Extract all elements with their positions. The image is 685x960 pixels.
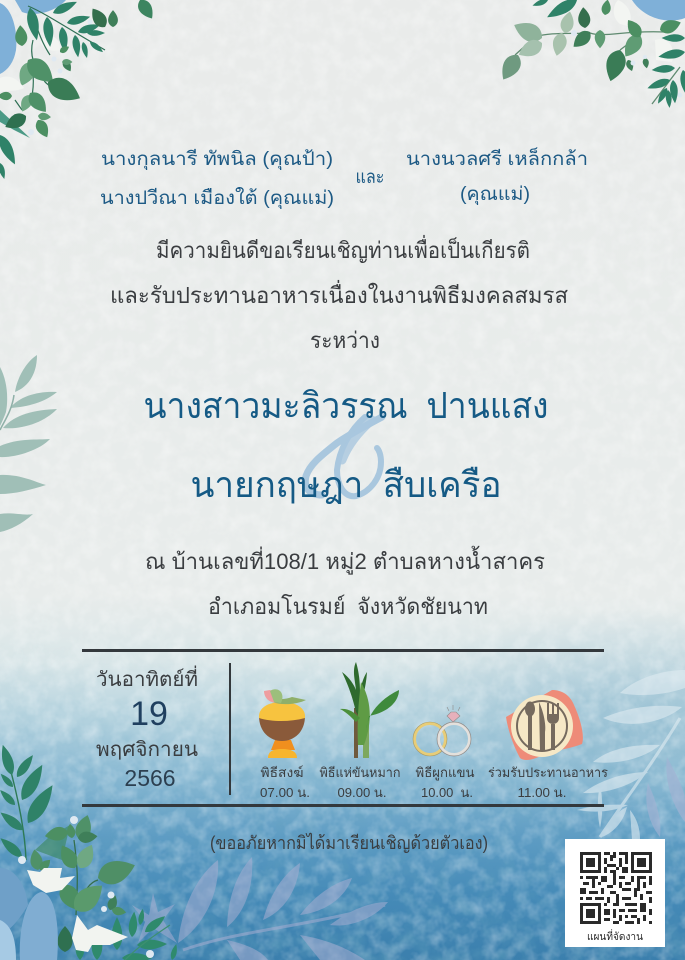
ceremony labels: 07.00 น.	[260, 785, 310, 800]
faded purple leaves bottom	[132, 857, 388, 960]
foliage top left	[0, 0, 157, 180]
connector and: และ	[356, 167, 384, 188]
rule bottom	[82, 804, 604, 807]
hosts left column	[100, 148, 334, 210]
icon: rings	[413, 705, 471, 756]
invitation text: ระหว่าง	[310, 328, 380, 353]
foliage bottom left	[0, 743, 179, 960]
hosts right column	[406, 146, 588, 206]
ceremony labels: พิธีสงฆ์	[260, 765, 304, 780]
icon: sugarcane	[340, 662, 399, 758]
ampersand ornament	[305, 417, 382, 496]
background	[0, 614, 685, 960]
icon: ceremonial bowl	[259, 689, 306, 758]
hosts right column: นางนวลศรี เหล็กกล้า	[406, 146, 588, 170]
faded white leaves right	[577, 670, 685, 840]
faded green fronds left	[0, 355, 57, 532]
date block: 2566	[124, 765, 176, 791]
foliage top right	[496, 0, 685, 108]
invitation text	[110, 234, 568, 353]
divider	[229, 663, 231, 795]
ceremony labels: พิธีผูกแขน	[416, 765, 475, 781]
ceremony labels	[260, 765, 608, 800]
venue text: อำเภอมโนรมย์ จังหวัดชัยนาท	[208, 594, 488, 619]
apology note: (ขออภัยหากมิได้มาเรียนเชิญด้วยตัวเอง)	[210, 832, 488, 853]
groom name: นายกฤษฎา สืบเครือ	[190, 464, 502, 505]
invitation text: มีความยินดีขอเรียนเชิญท่านเพื่อเป็นเกียรติ	[156, 234, 530, 263]
ceremony labels: 10.00 น.	[421, 785, 473, 800]
rule top	[82, 649, 604, 652]
ceremony labels: 09.00 น.	[338, 785, 386, 800]
invitation text: และรับประทานอาหารเนื่องในงานพิธีมงคลสมรส	[110, 279, 568, 308]
QR code	[580, 852, 652, 924]
date block: พฤศจิกายน	[96, 739, 198, 761]
venue text: ณ บ้านเลขที่108/1 หมู่2 ตำบลหางน้ำสาคร	[145, 546, 545, 575]
ceremony labels: 11.00 น.	[518, 785, 566, 800]
QR card: แผนที่จัดงาน	[587, 929, 643, 943]
hosts left column: นางกุลนารี ทัพนิล (คุณป้า)	[101, 148, 333, 171]
venue text	[145, 546, 545, 619]
QR card	[565, 839, 665, 947]
date block: วันอาทิตย์ที่	[96, 665, 198, 691]
ceremony labels: พิธีแห่ขันหมาก	[320, 765, 400, 780]
date block	[96, 665, 198, 791]
date block: 19	[130, 695, 168, 733]
ceremony labels: ร่วมรับประทานอาหาร	[488, 765, 608, 780]
hosts right column: (คุณแม่)	[460, 184, 530, 206]
faded purple leaves right	[646, 757, 685, 837]
bride name: นางสาวมะลิวรรณ ปานแสง	[144, 385, 548, 426]
hosts left column: นางปวีณา เมืองใต้ (คุณแม่)	[100, 187, 334, 210]
icon: plate and cutlery	[506, 690, 583, 760]
